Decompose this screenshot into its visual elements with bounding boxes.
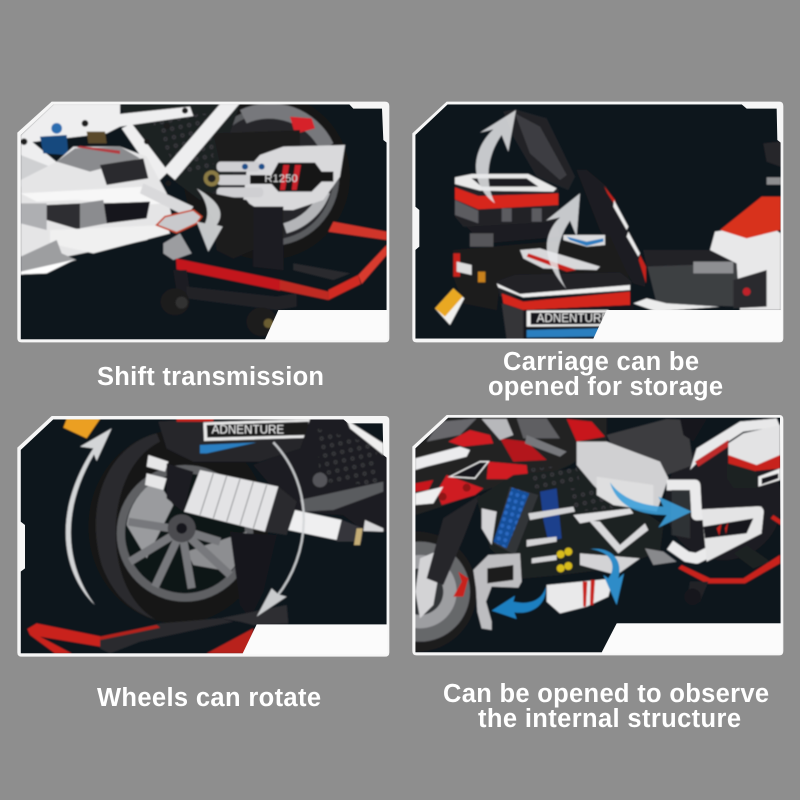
rim [117,465,253,602]
white belly pan [547,578,613,613]
top box [455,174,560,243]
red stand [27,605,288,653]
rear stand [645,515,781,605]
foot peg [157,210,202,233]
chain guard: R1250 [264,173,298,185]
panel: wheel rotation photo [13,415,393,662]
blue arrow top right [610,482,692,528]
caption: carriage storage [488,348,723,401]
rear wheel [183,93,350,260]
rotate arrow left [66,428,112,605]
panel 1 white corner [265,310,387,340]
dark tail tank [607,419,693,475]
right machinery [253,419,387,532]
caption: carriage storage: opened for storage [488,373,723,401]
panel 2 white corner [593,310,782,341]
tube sockets [20,106,189,186]
blue arrow middle [590,549,624,605]
panel: carriage storage photo [410,100,787,347]
bike tail right [633,142,781,312]
dark frame interior [120,104,240,200]
panel 1 white frame [17,102,389,342]
panel 4 white frame [412,415,783,655]
caption: carriage storage: Carriage can be [503,348,699,376]
caption: shift transmission: Shift transmission [97,363,324,391]
panel: internal structure photo [412,415,784,656]
caption: internal structure [443,680,769,733]
carriage box bottom: ADNENTURE [212,423,284,436]
black swingarm below [205,193,254,259]
open compartment interior [453,233,630,310]
front wheel [357,532,477,652]
rear right carriage [690,418,780,488]
panel 4 illustration [357,413,787,660]
panel 3 white frame [17,416,389,657]
panel 1 illustration [20,104,387,340]
blue radiator [493,487,538,555]
blue parts [40,135,68,155]
lower black stand with casters [161,287,297,336]
blue arrow left [492,587,546,619]
front fork [427,495,480,585]
panel 3 illustration [13,415,393,662]
panel: shift transmission photo [13,93,393,347]
tire [88,430,268,623]
panel 3 white corner [243,625,387,654]
second lid [577,170,646,287]
white clamps [147,455,168,472]
arrow: lower lid opening [546,193,580,289]
white side frame [573,442,668,553]
yellow tag [435,288,464,325]
engine body [21,146,193,257]
rear wheel [665,443,782,560]
stand leg [230,532,277,618]
rotate arrow right [273,442,304,597]
shock absorber [167,463,363,545]
caption: wheels rotate: Wheels can rotate [97,684,321,712]
red stand [173,222,387,300]
caption: internal structure: Can be opened to observe [443,680,769,708]
carriage box bottom [158,419,313,462]
white upper frame [21,104,239,188]
front box [497,273,633,340]
centre dark engine cavity [477,468,663,578]
front box: ADNENTURE [537,312,609,325]
exhaust gear [21,240,77,275]
chain guard [204,145,345,210]
caption: internal structure: the internal structure [478,705,741,733]
top fairing red and black [415,418,607,515]
shift arrow [197,188,223,252]
rear swing arm white [667,485,758,558]
panel 2 white frame [412,102,783,342]
chain guard white [672,490,762,562]
left white bracket [473,553,522,630]
yellow bolts [557,548,572,572]
arrow: upper lid opening [476,110,516,203]
panel 4 white corner [602,623,782,654]
white lower tubes [482,507,640,575]
panel 2 illustration [410,100,787,347]
upper lid [503,109,575,190]
yellow tag piece [63,419,100,438]
